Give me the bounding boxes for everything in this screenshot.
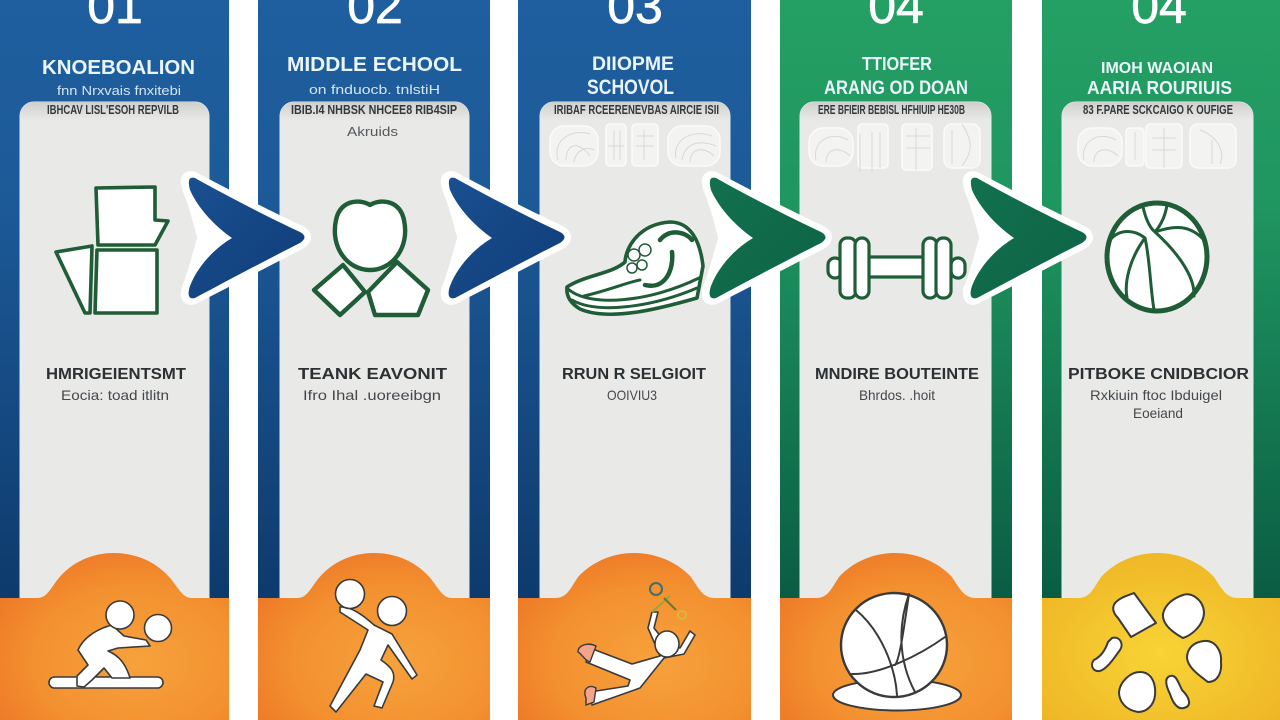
panel header band (540, 102, 730, 120)
panel heading: MNDIRE BOUTEINTE (815, 366, 979, 383)
column 5: major stage (1042, 0, 1280, 720)
icon: sneaker (567, 222, 703, 314)
panel description: OOIVIU3 (607, 387, 657, 403)
panel header text: 83 F.PARE SCKCAIGO K OUFIGE (1083, 103, 1233, 117)
column title line 2: ARANG OD DOAN (824, 78, 968, 99)
panel heading: HMRIGEIENTSMT (46, 366, 186, 383)
column 2: middle school (258, 0, 490, 720)
pink feet (578, 644, 596, 662)
column title line 2: AARIA ROURIUIS (1087, 78, 1232, 98)
content panel (1062, 102, 1253, 600)
icon: basketball on base (833, 593, 961, 710)
column subtitle: fnn Nrxvais fnxitebi (57, 83, 181, 98)
arrow 3 (708, 178, 826, 298)
column 3: diploma school (518, 0, 751, 720)
icon: basketball (1107, 203, 1207, 311)
orange footer with dome (0, 553, 229, 720)
orange footer with dome (780, 553, 1012, 720)
column title: KNOEBOALION (42, 57, 195, 79)
panel header text: IRIBAF RCEERENEVBAS AIRCIE ISII (554, 103, 719, 117)
column background (518, 0, 751, 600)
column background (1042, 0, 1280, 600)
panel header band (800, 102, 991, 120)
icon: team shapes (314, 202, 428, 315)
column 1: knowledge stage (0, 0, 229, 720)
panel description: Ifro Ihal .uoreeibgn (303, 387, 441, 403)
panel description line 2: Eoeiand (1133, 405, 1183, 421)
column title line 1: TTIOFER (862, 54, 932, 74)
orange footer with dome (518, 553, 751, 720)
arrow 1 (187, 178, 304, 298)
embossed pattern (550, 124, 720, 166)
icon: player throwing ball (330, 580, 417, 712)
content panel (20, 102, 209, 600)
panel header text: IBIB.I4 NHBSK NHCEE8 RIB4SIP (291, 103, 457, 117)
panel header band (1062, 102, 1253, 120)
panel heading: RRUN R SELGIOIT (562, 366, 706, 383)
column title line 2: SCHOVOL (587, 76, 674, 99)
column 4: transfer stage (780, 0, 1012, 720)
panel description: Eocia: toad itlitn (61, 387, 169, 403)
panel header text: ERE BFIEIR BEBISL HFHIUIP HE30B (818, 103, 965, 117)
arrow 2 (447, 178, 564, 298)
orange footer with dome (258, 553, 490, 720)
panel heading: TEANK EAVONIT (298, 366, 447, 383)
content panel (280, 102, 469, 600)
panel header text: IBHCAV LISL'ESOH REPVILB (47, 103, 179, 117)
embossed pattern (809, 124, 980, 172)
shoe laces (627, 244, 651, 273)
panel heading: PITBOKE CNIDBCIOR (1068, 366, 1249, 383)
column title line 1: IMOH WAOIAN (1101, 60, 1213, 77)
column background (0, 0, 229, 600)
column background (258, 0, 490, 600)
icon: scattered equipment (1092, 593, 1221, 712)
panel header band (280, 102, 469, 120)
panel description line 1: Rxkiuin ftoc Ibduigel (1090, 387, 1222, 403)
column subtitle: on fnduocb. tnlstiH (309, 82, 440, 97)
content panel (800, 102, 991, 600)
embossed pattern (1078, 124, 1236, 168)
column title line 1: DIIOPME (592, 54, 674, 75)
icon: building blocks (56, 187, 168, 313)
yellow footer with dome (1042, 553, 1280, 720)
column title: MIDDLE ECHOOL (287, 54, 462, 76)
icon: diving player (578, 583, 695, 705)
icon: dumbbell (828, 238, 965, 298)
arrow 4 (969, 178, 1086, 298)
panel header band (20, 102, 209, 120)
panel header second line: Akruids (347, 124, 399, 139)
icon: player crouching with ball (49, 601, 172, 688)
content panel (540, 102, 730, 600)
column background (780, 0, 1012, 600)
colourful ball fragment (650, 583, 686, 619)
panel description: Bhrdos. .hoit (859, 387, 935, 403)
